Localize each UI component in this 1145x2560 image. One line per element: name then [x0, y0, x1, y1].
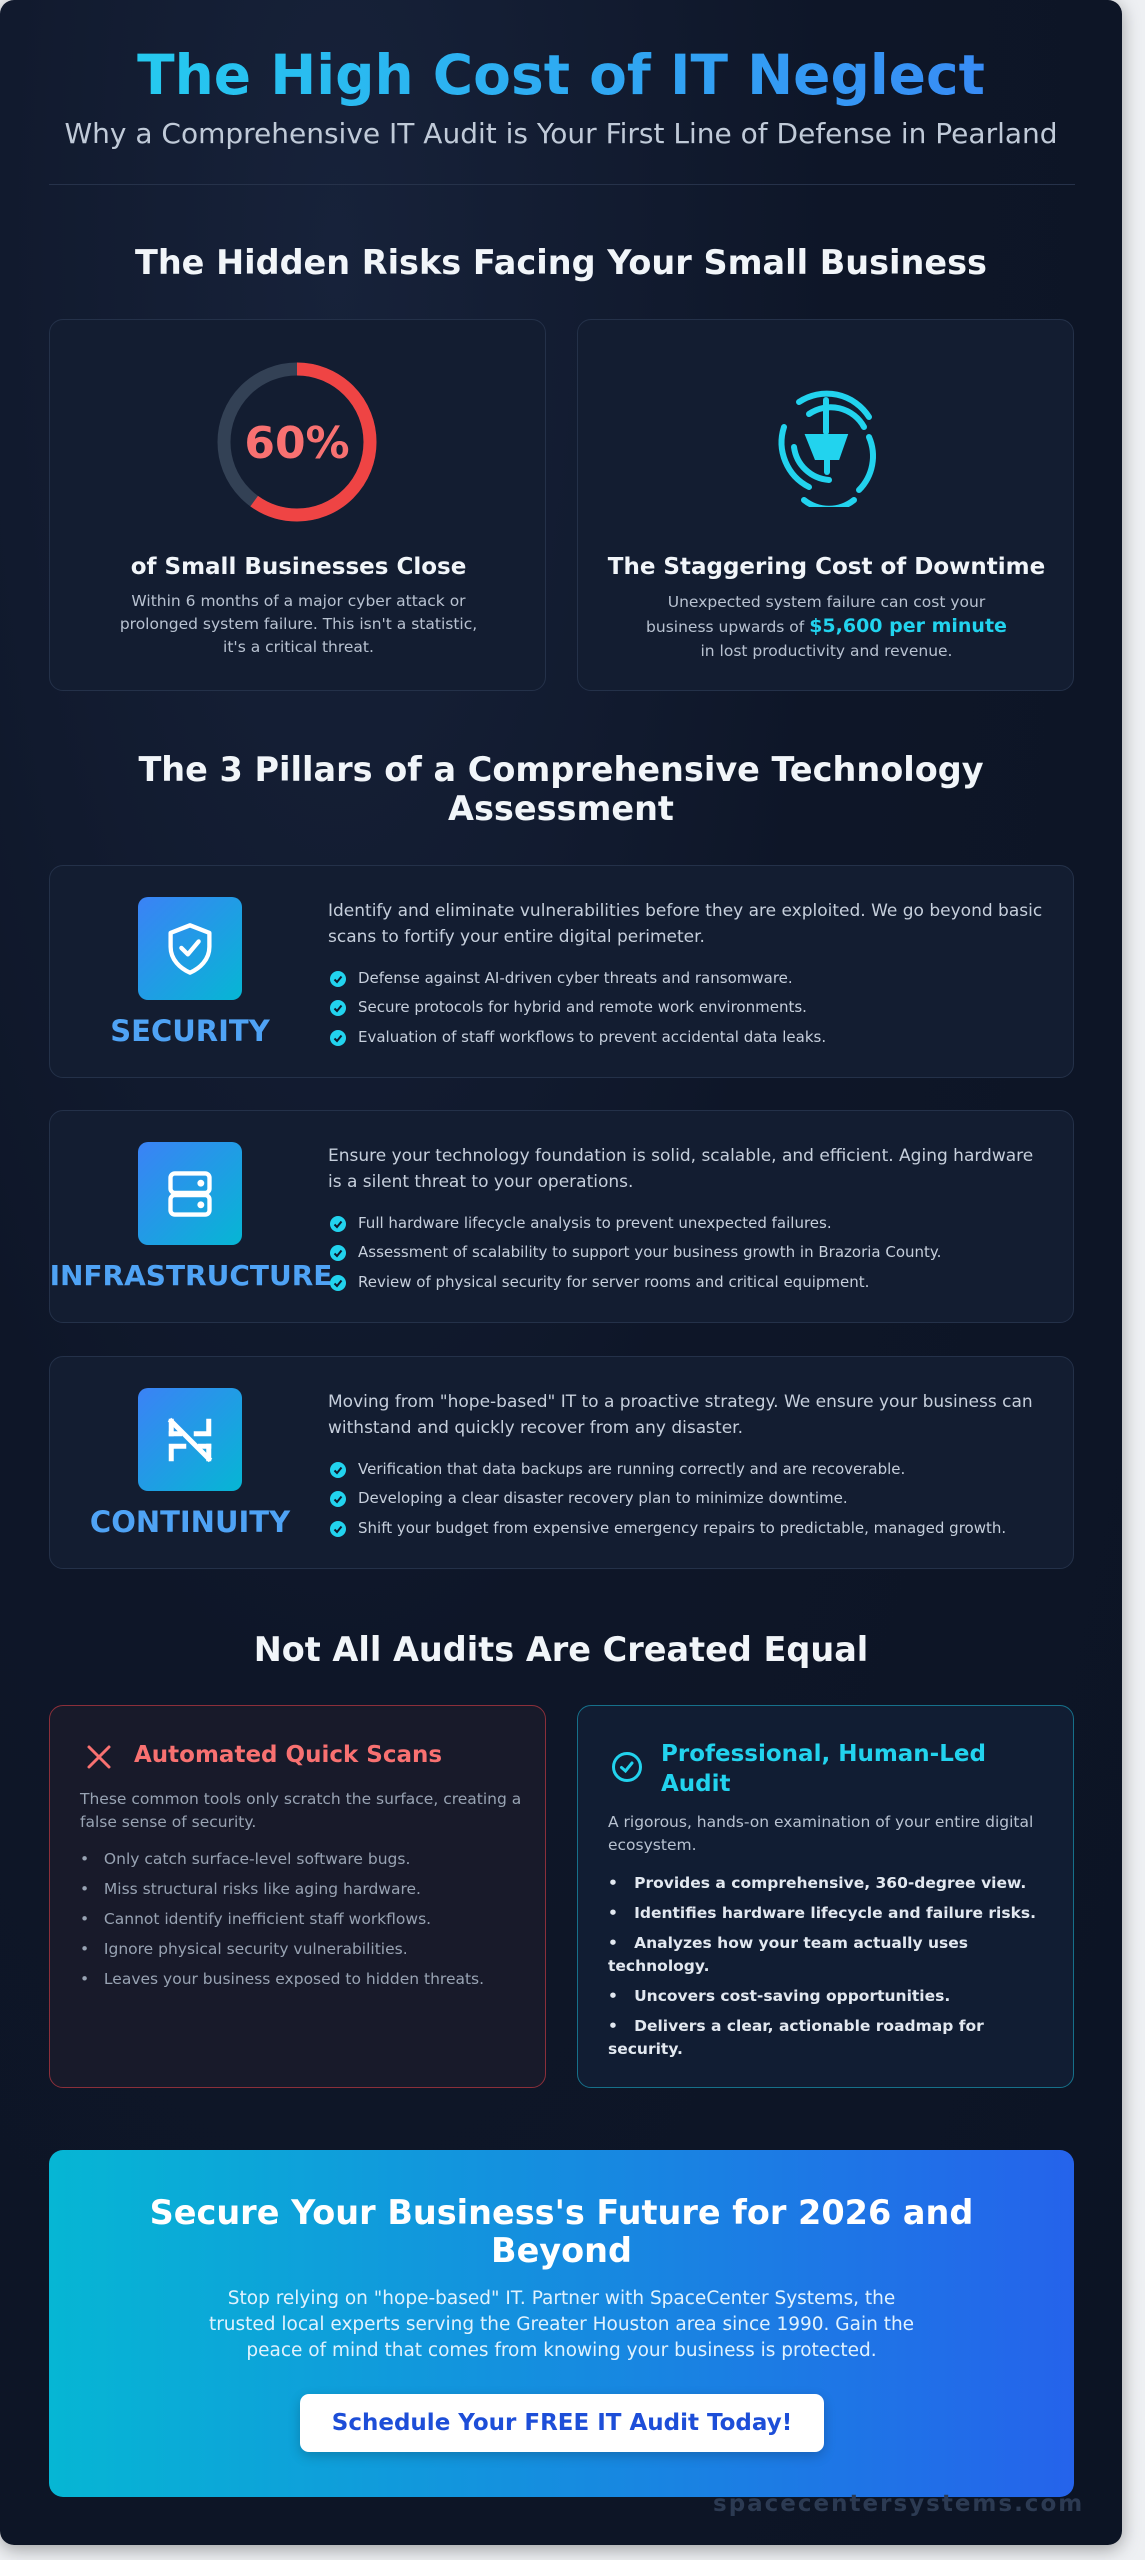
- bullet list: • Provides a comprehensive, 360-degree view.: [608, 1874, 1026, 1892]
- card title: of Small Businesses Close: [131, 554, 466, 580]
- bullet list: • Cannot identify inefficient staff workflows.: [80, 1910, 431, 1928]
- ring chart 60%: 60%: [244, 418, 350, 469]
- pillar: security: Defense against AI-driven cyber threats and ransomware.: [358, 969, 793, 987]
- bullet list: • Uncovers cost-saving opportunities.: [608, 1987, 950, 2005]
- CTA heading: [150, 2193, 973, 2270]
- bullet list: • Delivers a clear, actionable roadmap for security.: [608, 2017, 984, 2058]
- CTA panel: [49, 2150, 1074, 2497]
- pillar: continuity: [49, 1356, 1074, 1569]
- description: These common tools only scratch the surface, creating a false sense of security.: [80, 1790, 521, 1831]
- card description: Within 6 months of a major cyber attack or prolonged system failure. This isn't a statistic, it's a critical threat.: [120, 592, 477, 656]
- description: Identify and eliminate vulnerabilities before they are exploited. We go beyond basic scans to fortify your entire digital perimeter.: [328, 901, 1042, 947]
- title: The High Cost of IT Neglect: [137, 43, 985, 107]
- bullet list: • Identifies hardware lifecycle and failure risks.: [608, 1904, 1036, 1922]
- icon: unplugged: [778, 390, 876, 507]
- description: Ensure your technology foundation is solid, scalable, and efficient. Aging hardware: [328, 1146, 1033, 1166]
- card description: business upwards of $5,600 per minute: [646, 615, 1007, 637]
- icon: shield: [138, 897, 242, 1000]
- pillar: security: Evaluation of staff workflows to prevent accidental data leaks.: [358, 1028, 826, 1046]
- pillar: infrastructure: Full hardware lifecycle analysis to prevent unexpected failures.: [358, 1214, 832, 1232]
- title: [661, 1741, 986, 1797]
- icon: recovery arrows: [138, 1388, 242, 1491]
- pillar: security: Secure protocols for hybrid and remote work environments.: [358, 998, 807, 1016]
- CTA heading: Beyond: [491, 2231, 632, 2270]
- pillar: security: [49, 865, 1074, 1078]
- icon: check circle: [612, 1752, 642, 1782]
- title: Automated Quick Scans: [134, 1742, 442, 1768]
- description: [328, 1146, 1033, 1192]
- bullets: [330, 1214, 832, 1232]
- CTA paragraph: peace of mind that comes from knowing your business is protected.: [246, 2340, 877, 2361]
- stat card: 60%: [49, 319, 546, 691]
- icon: server: [138, 1142, 242, 1245]
- card description: Unexpected system failure can cost your: [668, 593, 985, 611]
- pillar: infrastructure: Assessment of scalability to support your business growth in Brazoria County.: [358, 1243, 941, 1261]
- title: Professional, Human-Led: [661, 1741, 986, 1767]
- bullet list: • Miss structural risks like aging hardware.: [80, 1880, 421, 1898]
- stat card: downtime: [577, 319, 1074, 691]
- CTA paragraph: Stop relying on "hope-based" IT. Partner with SpaceCenter Systems, the: [228, 2288, 895, 2309]
- label: SECURITY: [110, 1014, 270, 1048]
- CTA heading: Secure Your Business's Future for 2026 and: [150, 2193, 973, 2232]
- bullets: [330, 969, 793, 987]
- heading: 3 pillars: Assessment: [448, 789, 674, 828]
- bullet list: • Only catch surface-level software bugs.: [80, 1850, 410, 1868]
- CTA button: Schedule Your FREE IT Audit Today!: [332, 2410, 792, 2436]
- pillar: continuity: Developing a clear disaster recovery plan to minimize downtime.: [358, 1489, 848, 1507]
- bullet list: • Ignore physical security vulnerabilities.: [80, 1940, 408, 1958]
- title: Audit: [661, 1771, 731, 1797]
- description: Moving from "hope-based" IT to a proactive strategy. We ensure your business can withstand and quickly recover from any disaster.: [328, 1392, 1033, 1438]
- watermark: spacecentersystems.com: [713, 2491, 1084, 2517]
- compare card: human-led audit: [577, 1705, 1074, 2088]
- subtitle: Why a Comprehensive IT Audit is Your First Line of Defense in Pearland: [64, 117, 1058, 150]
- bullet list: • Leaves your business exposed to hidden threats.: [80, 1970, 484, 1988]
- pillar: continuity: Shift your budget from expensive emergency repairs to predictable, managed growth.: [358, 1519, 1006, 1537]
- CTA paragraph: trusted local experts serving the Greater Houston area since 1990. Gain the: [209, 2314, 914, 2335]
- heading: 3 pillars: [138, 750, 984, 828]
- pillar: infrastructure: [49, 1110, 1074, 1323]
- bullets: [330, 1460, 905, 1478]
- pillar: infrastructure: Review of physical security for server rooms and critical equipment.: [358, 1273, 869, 1291]
- compare card: automated scans: [49, 1705, 546, 2088]
- description: is a silent threat to your operations.: [328, 1172, 633, 1192]
- card description: in lost productivity and revenue.: [700, 642, 952, 660]
- card description: [646, 593, 1007, 660]
- pillar: continuity: Verification that data backups are running correctly and are recoverable.: [358, 1460, 905, 1478]
- card title: The Staggering Cost of Downtime: [608, 554, 1045, 580]
- CTA paragraph: [209, 2288, 914, 2361]
- bullet list: [608, 1874, 1036, 2058]
- label: CONTINUITY: [90, 1505, 290, 1539]
- icon: X: [87, 1745, 111, 1769]
- bullet list: • Analyzes how your team actually uses technology.: [608, 1934, 968, 1975]
- heading: not all audits: Not All Audits Are Created Equal: [254, 1630, 868, 1669]
- ring chart 60%: [218, 362, 376, 522]
- description: A rigorous, hands-on examination of your entire digital ecosystem.: [608, 1813, 1033, 1854]
- heading: hidden risks: The Hidden Risks Facing Your Small Business: [135, 243, 987, 282]
- CTA button: [300, 2394, 824, 2452]
- label: INFRASTRUCTURE: [50, 1259, 332, 1292]
- heading: 3 pillars: The 3 Pillars of a Comprehensive Technology: [138, 750, 984, 789]
- bullet list: [80, 1850, 484, 1988]
